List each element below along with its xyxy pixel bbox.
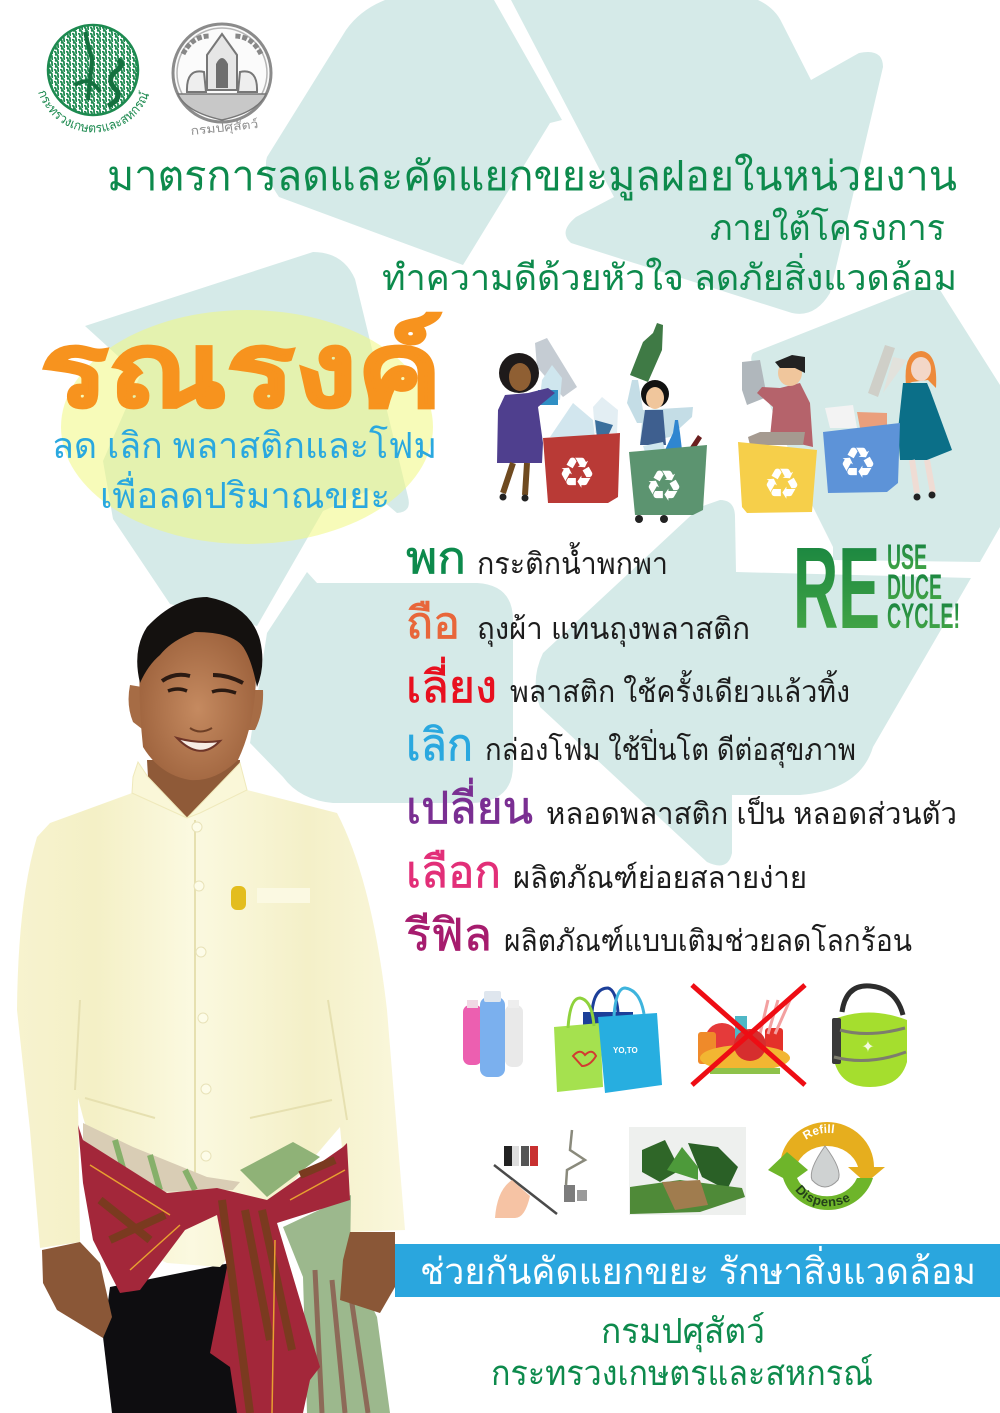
face: [139, 622, 256, 780]
red sash: [78, 1125, 350, 1413]
department names: [491, 1312, 873, 1393]
icon: crossed-out plastic ware: [692, 985, 805, 1085]
logo: reuse reduce recycle: USE: [887, 538, 927, 577]
jacket folds and pockets: [75, 820, 347, 1180]
icon: refill cycle: Refill: [802, 1124, 834, 1140]
logo: department of livestock seal: [173, 24, 271, 139]
icon: lunch box: ✦: [861, 1039, 875, 1056]
item: avoid: เลี่ยง: [406, 656, 497, 712]
item: hold: ถุงผ้า แทนถุงพลาสติก: [477, 613, 750, 648]
logo: reuse reduce recycle: DUCE: [887, 568, 942, 607]
item: quit: เลิก: [406, 721, 473, 770]
logo: ministry of agriculture seal: กระทรวงเกษตรและสหกรณ์: [38, 90, 149, 132]
title: มาตรการลดและคัดแยกขยะมูลฝอยในหน่วยงาน: [107, 153, 957, 201]
item: quit: [406, 721, 856, 770]
yellow highlight ellipse: [61, 310, 433, 544]
hands: [42, 1242, 112, 1338]
illustration: people sorting waste: [497, 323, 952, 523]
plaid sash band: [83, 1123, 240, 1192]
department names: กรมปศุสัตว์: [601, 1312, 765, 1352]
call-to-action banner: ช่วยกันคัดแยกขยะ รักษาสิ่งแวดล้อม: [420, 1245, 976, 1292]
ears: [129, 685, 263, 732]
icon: lunch box: [832, 986, 907, 1087]
item: avoid: พลาสติก ใช้ครั้งเดียวแล้วทิ้ง: [510, 670, 850, 709]
item: choose: [406, 848, 807, 897]
buttons: [192, 822, 211, 1161]
campaign subheading: [52, 425, 437, 516]
icon: bottles: [463, 991, 523, 1077]
icon: banana leaf wrap: [629, 1127, 746, 1215]
item: carry: พก: [406, 534, 466, 583]
man with yellow bin: [738, 355, 817, 513]
trousers: [103, 1263, 237, 1413]
woman with red bin: ♻: [561, 455, 593, 491]
facial features: [162, 675, 243, 683]
woman with blue bin: ♻: [842, 445, 874, 481]
icon: refill cycle: Dispense: [795, 1184, 850, 1207]
item: choose: ผลิตภัณฑ์ย่อยสลายง่าย: [513, 861, 807, 895]
department names: กระทรวงเกษตรและสหกรณ์: [491, 1354, 873, 1393]
background recycling arrows: [85, 0, 1000, 865]
neck: [147, 760, 240, 818]
item: carry: กระติกน้ำพกพา: [477, 542, 668, 581]
item: change: หลอดพลาสติก เป็น หลอดส่วนตัว: [546, 795, 957, 831]
icon: personal straws: [494, 1130, 587, 1218]
logo: ministry of agriculture seal: [38, 24, 149, 132]
title: ทำความดีด้วยหัวใจ ลดภัยสิ่งแวดล้อม: [382, 253, 957, 298]
sash stripes: [100, 1160, 335, 1413]
campaign heading: รณรงค์: [40, 312, 442, 429]
item: hold: ถือ: [406, 599, 460, 648]
item: refill: [405, 911, 912, 960]
icon: cloth bags: YO,TO: [613, 1046, 638, 1055]
title: [107, 153, 957, 298]
item: refill: รีฟิล: [405, 911, 492, 960]
campaign subheading: ลด เลิก พลาสติกและโฟม: [52, 425, 437, 466]
item: change: เปลี่ยน: [406, 777, 533, 833]
collar: [132, 762, 247, 818]
green rolled cloth: [240, 1142, 320, 1197]
item: choose: เลือก: [406, 848, 501, 897]
title: ภายใต้โครงการ: [710, 207, 945, 248]
item: avoid: [406, 656, 850, 712]
item: change: [406, 777, 957, 833]
item: quit: กล่องโฟม ใช้ปิ่นโต ดีต่อสุขภาพ: [485, 729, 856, 769]
logo: reuse reduce recycle: RE: [793, 523, 880, 653]
campaign subheading: เพื่อลดปริมาณขยะ: [100, 471, 390, 516]
girl with green bin: [627, 323, 707, 523]
item: hold: [406, 599, 750, 648]
woman with red bin: [497, 338, 620, 503]
gold pin: [231, 886, 246, 910]
item: carry: [406, 534, 668, 583]
logo: department of livestock seal: กรมปศุสัตว์: [190, 117, 259, 139]
item: refill: ผลิตภัณฑ์แบบเติมช่วยลดโลกร้อน: [504, 923, 912, 958]
striped cloth: [283, 1195, 390, 1413]
action list: [405, 534, 957, 960]
hair: [137, 597, 262, 687]
man with yellow bin: ♻: [766, 466, 798, 502]
girl with green bin: ♻: [648, 468, 680, 504]
icon: refill cycle: [768, 1122, 885, 1210]
portrait: man in cream silk jacket: [17, 597, 405, 1413]
icon: cloth bags: [554, 988, 662, 1093]
woman with blue bin: [823, 345, 952, 500]
jacket: [17, 790, 405, 1267]
